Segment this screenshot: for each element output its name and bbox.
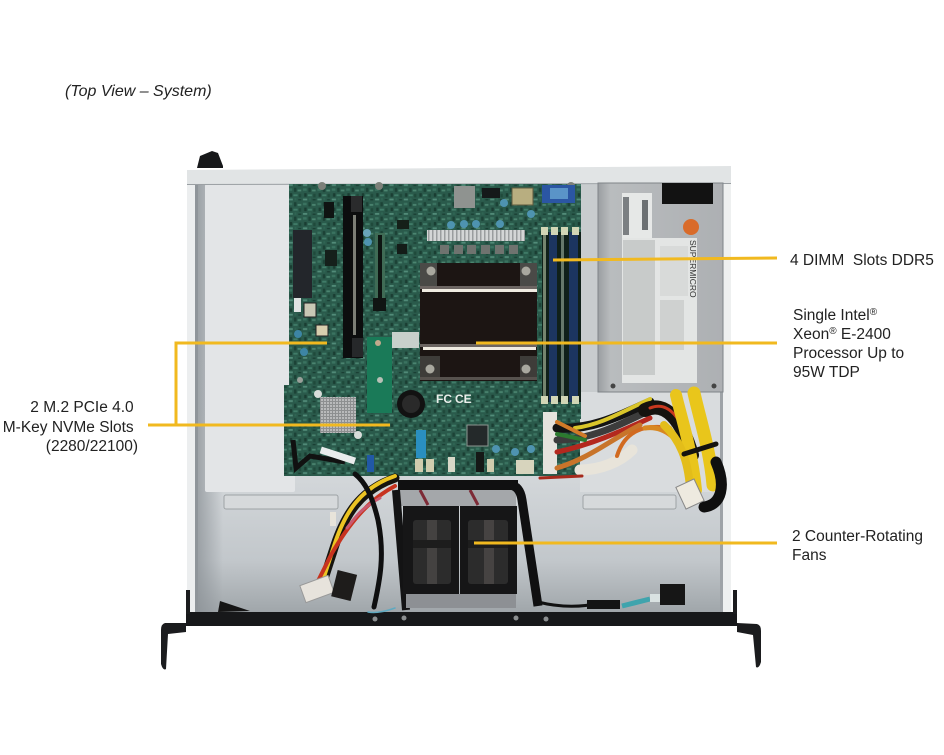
power cables xyxy=(540,393,721,507)
light mounting plate xyxy=(205,184,295,492)
power connector xyxy=(543,412,557,474)
battery xyxy=(397,390,425,418)
label: processor: ® xyxy=(870,307,878,318)
rack ear right xyxy=(737,623,761,667)
VRM heatsink xyxy=(427,230,525,241)
label: M.2 slots: 2 M.2 PCIe 4.0 xyxy=(30,399,134,416)
leader line: processor xyxy=(476,342,777,344)
label: DIMM slots: 4 DIMM Slots DDR5 xyxy=(790,252,934,269)
left black slot xyxy=(293,230,312,298)
leader bracket: M.2 slots xyxy=(148,343,390,425)
SATA label cable xyxy=(293,440,345,468)
title: (Top View – System) xyxy=(65,83,212,100)
PSU barcode label xyxy=(622,193,652,238)
CPU heatsink xyxy=(420,263,537,381)
small IC blocks xyxy=(324,202,334,218)
fan left xyxy=(403,506,459,594)
leader line: DIMM slots xyxy=(553,258,777,260)
PCIe riser slot xyxy=(343,196,363,358)
label: processor: Processor Up to xyxy=(793,345,904,362)
power supply xyxy=(598,183,723,392)
label: processor: 95W TDP xyxy=(793,364,860,381)
latch handle xyxy=(197,151,223,168)
label: processor: Single Intel xyxy=(793,307,870,324)
narrow slot xyxy=(375,233,385,311)
fan right xyxy=(460,506,517,594)
label: processor: Xeon xyxy=(793,326,829,343)
PSU vent xyxy=(662,183,713,204)
label: processor: ® xyxy=(829,326,837,337)
front bar xyxy=(186,612,737,626)
standoffs xyxy=(318,182,326,190)
chip xyxy=(467,425,488,446)
right data cable xyxy=(538,584,685,609)
white connector xyxy=(676,479,704,509)
motherboard: CE xyxy=(455,392,472,406)
top lip xyxy=(187,166,731,185)
chassis floor xyxy=(187,170,731,614)
leader line: fans xyxy=(474,542,777,544)
label: M.2 slots: M-Key NVMe Slots xyxy=(3,419,134,436)
server chassis top view xyxy=(161,151,761,669)
left drive cables xyxy=(300,474,395,612)
bracket tabs xyxy=(224,495,338,509)
PSU brand logo xyxy=(683,219,699,235)
label: fans: 2 Counter-Rotating xyxy=(792,528,923,545)
chipset heatsink xyxy=(320,397,356,433)
motherboard xyxy=(284,182,581,476)
capacitors xyxy=(447,221,455,229)
side walls xyxy=(187,178,195,612)
PSU spec label xyxy=(622,238,697,383)
blue header xyxy=(416,430,426,458)
black corner wedge xyxy=(218,601,250,612)
FC CE marks: FC xyxy=(436,392,452,406)
DIMM slots xyxy=(542,232,581,402)
label: fans: Fans xyxy=(792,547,827,564)
label: M.2 slots: (2280/22100) xyxy=(46,438,138,455)
cooling fans xyxy=(396,480,538,610)
rack ear left xyxy=(161,623,186,669)
power supply: SUPERMICRO xyxy=(688,240,698,298)
M.2 green area xyxy=(367,337,392,413)
label: processor: E-2400 xyxy=(837,326,891,343)
top connectors xyxy=(454,186,475,208)
